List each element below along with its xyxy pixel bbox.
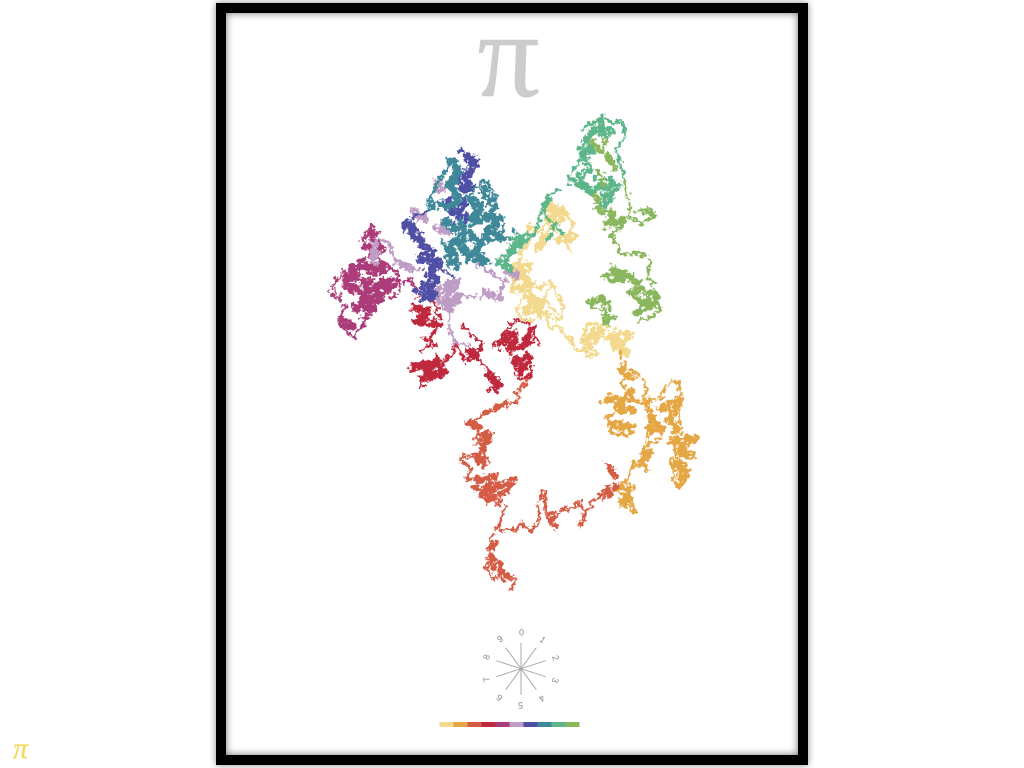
compass digit labels: 8 xyxy=(481,653,492,661)
walk: digit 5 lilac xyxy=(374,180,516,345)
compass digit labels xyxy=(481,628,561,710)
walk: digit 3 crimson xyxy=(414,295,538,392)
compass digit labels: 0 xyxy=(519,628,524,638)
walk: digit 0 yellow xyxy=(512,205,630,357)
compass digit labels: 4 xyxy=(537,693,547,704)
walk: digit 7 teal xyxy=(428,158,520,268)
compass digit labels: 9 xyxy=(495,634,505,645)
walk: digit 8 sea green xyxy=(498,116,626,268)
compass digit labels: 1 xyxy=(538,634,548,645)
digit compass legend xyxy=(481,628,561,710)
compass digit labels: 7 xyxy=(481,675,492,683)
walk: digit 1 orange xyxy=(600,352,694,512)
compass digit labels: 3 xyxy=(550,676,561,684)
poster frame xyxy=(216,3,808,765)
compass spokes xyxy=(496,643,546,695)
compass digit labels: 6 xyxy=(494,692,504,703)
compass digit labels: 5 xyxy=(518,700,523,710)
walk: digit 6 indigo xyxy=(404,148,476,300)
colour scale bar xyxy=(440,722,580,727)
walk: digit 9 green xyxy=(590,140,660,322)
random walk of pi digits xyxy=(330,116,694,590)
compass digit labels: 2 xyxy=(550,654,561,662)
small pi logo: π xyxy=(13,732,28,765)
walk: digit 4 magenta xyxy=(330,225,418,338)
walk: digit 2 orange red xyxy=(460,373,616,590)
